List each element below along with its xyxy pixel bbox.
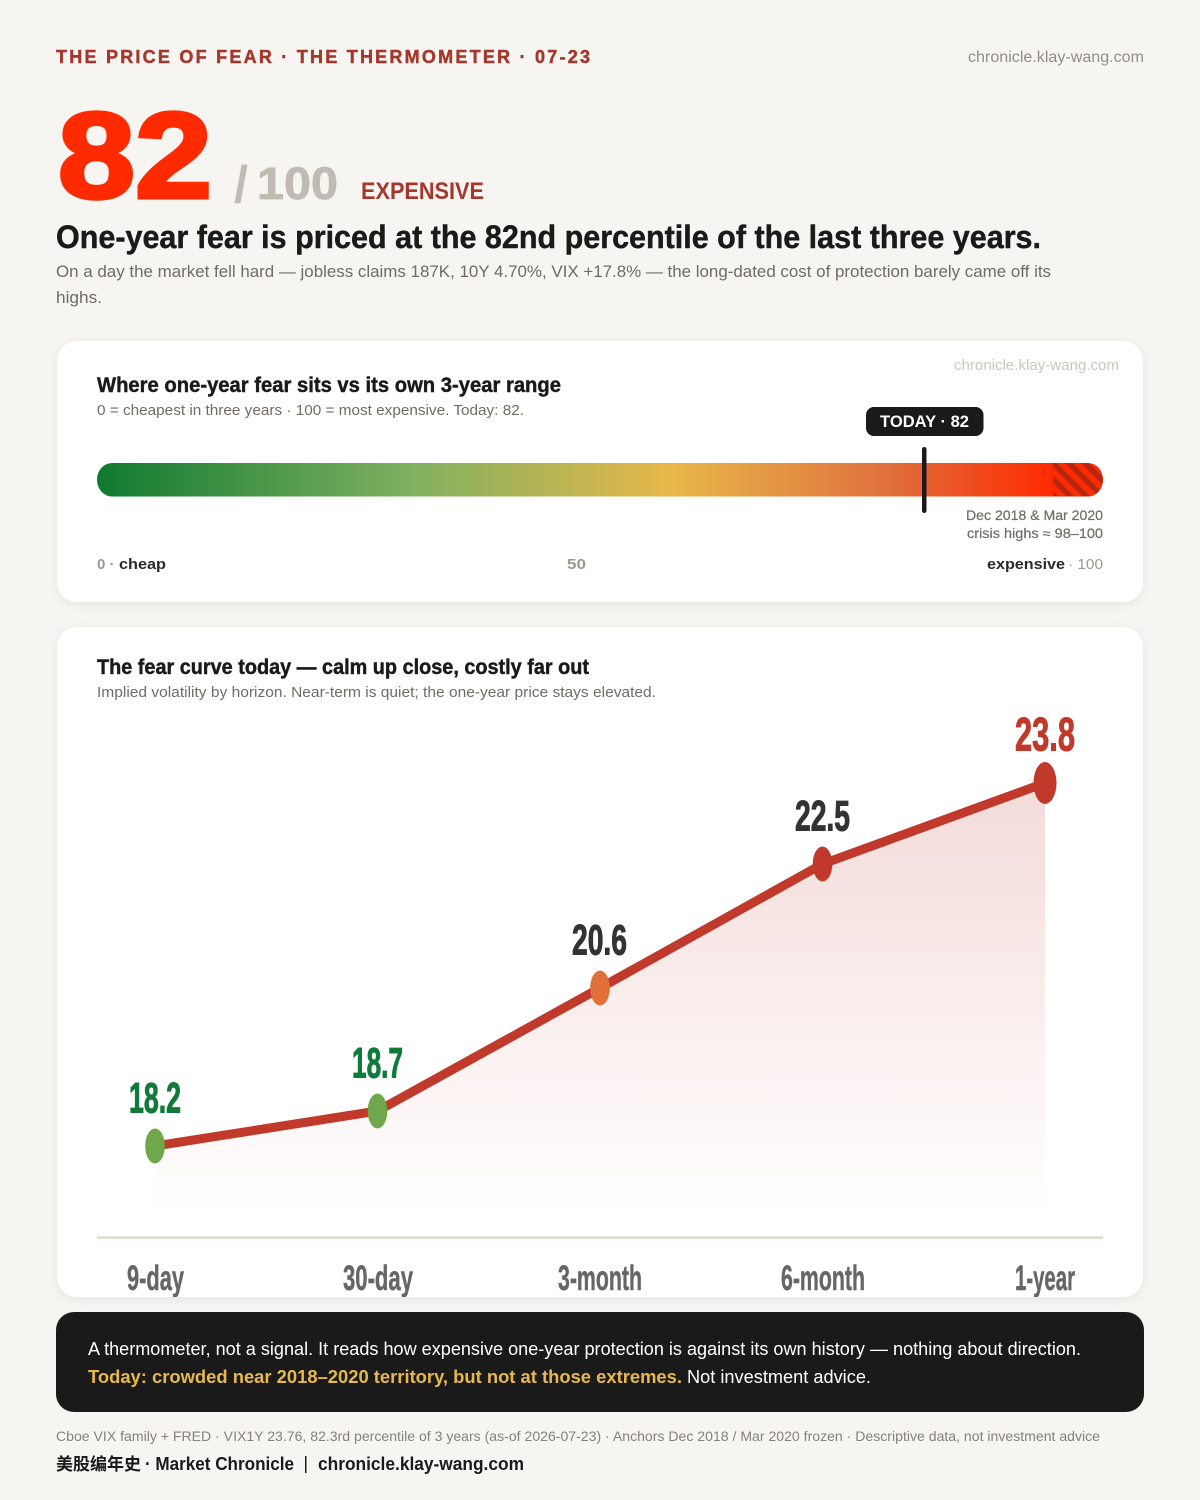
crisis note: crisis highs ≈ 98–100 — [967, 526, 1103, 541]
x axis labels: 6-month — [781, 1259, 865, 1298]
point: 30-day: 18.7 — [352, 1040, 403, 1088]
subtitle — [56, 262, 1051, 307]
point: 9-day: 18.2 — [129, 1074, 181, 1122]
scale label: cheap: cheap — [119, 556, 166, 573]
point: 1-year — [1015, 708, 1075, 804]
header kicker: THE PRICE OF FEAR · THE THERMOMETER · 07-23 — [56, 47, 590, 67]
score slash: / — [234, 156, 248, 214]
point: 3-month — [572, 916, 627, 1006]
scale label: expensive — [987, 556, 1103, 573]
panel heading: Where one-year fear sits vs its own 3-year range — [97, 374, 561, 397]
scale label: expensive: expensive — [987, 556, 1065, 573]
panel: thermometer range — [57, 341, 1143, 602]
crisis note: Dec 2018 & Mar 2020 — [966, 508, 1103, 523]
point: 9-day — [129, 1074, 181, 1164]
curve line — [155, 783, 1045, 1146]
callout: A thermometer, not a signal. It reads how expensive one-year protection is against its own history — nothing about direction. — [88, 1338, 1081, 1359]
big score number: 82 — [58, 88, 212, 224]
x axis labels: 3-month — [558, 1259, 642, 1298]
score label: EXPENSIVE — [361, 178, 484, 205]
footer brand: · Market Chronicle — [145, 1454, 294, 1474]
callout — [56, 1312, 1144, 1412]
axis line — [97, 1236, 1103, 1239]
panel subheading: 0 = cheapest in three years · 100 = most expensive. Today: 82. — [97, 403, 524, 419]
x axis labels: 1-year — [1015, 1259, 1075, 1298]
point: 6-month: 22.5 — [795, 792, 850, 840]
score headline — [58, 88, 484, 224]
crisis note — [966, 508, 1103, 541]
panel heading: The fear curve today — calm up close, costly far out — [97, 656, 589, 679]
scale label: cheap — [97, 556, 166, 573]
area under curve — [155, 783, 1045, 1215]
point: 3-month: 20.6 — [572, 916, 627, 964]
point: 30-day — [352, 1040, 403, 1128]
callout: Not investment advice. — [687, 1366, 871, 1387]
x axis labels: 9-day — [127, 1259, 184, 1298]
footer brand: 美股编年史 — [56, 1454, 141, 1474]
panel subheading: Implied volatility by horizon. Near-term is quiet; the one-year price stays elevated. — [97, 685, 656, 701]
subtitle: On a day the market fell hard — jobless claims 187K, 10Y 4.70%, VIX +17.8% — the long-dated cost of protection barely came off its — [56, 262, 1051, 281]
scale label: 50: 50 — [567, 556, 586, 573]
source line: Cboe VIX family + FRED · VIX1Y 23.76, 82.3rd percentile of 3 years (as-of 2026-07-23) · Anchors Dec 2018 / Mar 2020 frozen · Descriptive data, not investment advice — [56, 1428, 1100, 1444]
panel: fear curve — [57, 627, 1143, 1298]
subtitle: highs. — [56, 288, 102, 307]
header site url: chronicle.klay-wang.com — [968, 49, 1144, 66]
main title: One-year fear is priced at the 82nd percentile of the last three years. — [56, 219, 1041, 255]
point: 6-month — [795, 792, 850, 882]
scale label: cheap: 0 · — [97, 556, 115, 573]
x axis labels — [128, 1264, 1075, 1297]
watermark: chronicle.klay-wang.com — [954, 358, 1119, 374]
callout: Today: crowded near 2018–2020 territory, but not at those extremes. — [88, 1366, 682, 1387]
scale label: expensive: · 100 — [1068, 556, 1103, 573]
today marker — [922, 447, 926, 513]
today badge — [866, 407, 984, 436]
footer brand — [56, 1454, 524, 1474]
gradient bar — [97, 463, 1103, 496]
footer brand: chronicle.klay-wang.com — [318, 1454, 524, 1474]
x axis labels: 30-day — [343, 1259, 413, 1298]
score denominator: 100 — [257, 158, 338, 209]
point: 1-year: 23.8 — [1015, 708, 1075, 760]
today badge: TODAY · 82 — [880, 413, 969, 431]
